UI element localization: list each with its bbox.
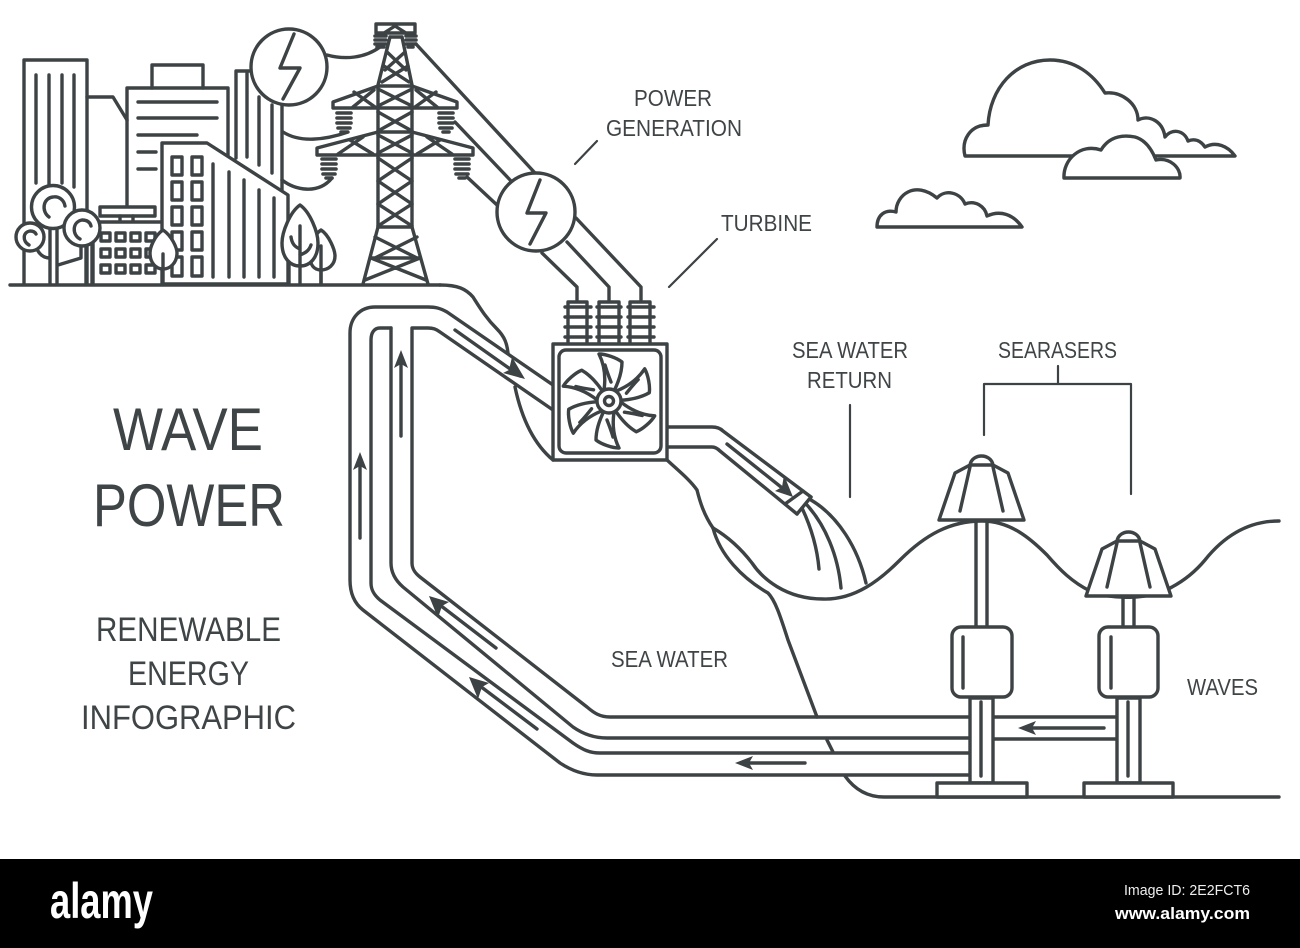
label: waves: WAVES (1187, 674, 1258, 700)
turbine bushings (565, 302, 654, 343)
base (1084, 783, 1173, 797)
title (93, 396, 285, 539)
label: sea water: SEA WATER (611, 646, 728, 672)
generator icon bottom (497, 173, 575, 251)
float (1086, 541, 1171, 596)
trees left (16, 186, 100, 284)
trees right (282, 205, 335, 284)
subtitle (81, 611, 296, 737)
label: searasers: SEARASERS (998, 337, 1117, 363)
building: tall left tower (24, 60, 127, 284)
arrow: up inner pipe (394, 350, 408, 436)
fan blades (562, 354, 656, 448)
float (939, 465, 1024, 520)
base (937, 783, 1027, 797)
ground line (10, 283, 440, 287)
arrow: diagonal upper (429, 596, 496, 648)
label: power generation (606, 85, 742, 141)
arrow: into turbine (455, 330, 525, 379)
pump body (1099, 627, 1158, 697)
wires (282, 44, 641, 300)
sea water return pipe (668, 427, 866, 588)
footer bar (0, 859, 1300, 948)
pump body (952, 627, 1012, 697)
footer logo: alamy (50, 873, 153, 929)
wires to generator (416, 44, 535, 205)
transmission tower (317, 24, 473, 284)
middle cloud (1064, 136, 1180, 178)
generator icon top (251, 29, 327, 105)
tower arms (317, 86, 473, 155)
footer url: www.alamy.com (1114, 904, 1250, 923)
turbine inner frame (559, 350, 661, 453)
subtitle: RENEWABLE (96, 611, 281, 649)
searaser 1 (937, 456, 1027, 797)
arrow: diagonal lower (469, 677, 537, 729)
stem upper (1123, 597, 1134, 627)
subtitle: ENERGY (128, 655, 249, 693)
title: POWER (93, 472, 285, 539)
tree centre (150, 230, 177, 284)
stem upper (976, 522, 987, 627)
tower top cap (376, 24, 415, 33)
stem lower (1117, 698, 1140, 783)
label: power generation: POWER (634, 85, 712, 111)
insulators (322, 36, 469, 178)
stem lower (970, 698, 993, 783)
city buildings (10, 60, 440, 285)
subtitle: INFOGRAPHIC (81, 699, 296, 737)
leader lines (575, 141, 1131, 497)
footer image id: Image ID: 2E2FCT6 (1124, 882, 1250, 899)
tower lattice (365, 37, 426, 280)
coast cliff (440, 285, 1279, 797)
wires to turbine (542, 218, 641, 300)
arrow: horizontal left (735, 756, 805, 770)
arrow: up outer pipe (353, 452, 367, 538)
turbine housing (553, 344, 667, 460)
small cloud (877, 190, 1022, 227)
building: low block with solar panel (93, 207, 163, 284)
big cloud (964, 60, 1235, 156)
water outflow (802, 500, 866, 588)
label: sea water return: SEA WATER (792, 337, 908, 363)
tower body (363, 37, 428, 284)
clouds (877, 60, 1235, 227)
searaser 2 (1084, 532, 1173, 797)
wave line (713, 521, 1279, 599)
arrow: horizontal right (1018, 721, 1104, 735)
label: power generation: GENERATION (606, 115, 742, 141)
title: WAVE (113, 396, 263, 463)
building: front angled building (162, 143, 288, 284)
label: turbine: TURBINE (721, 210, 812, 236)
turbine (553, 302, 667, 460)
label: sea water return: RETURN (807, 367, 892, 393)
building: rear tower (236, 71, 282, 190)
label: sea water return (792, 337, 908, 393)
wires to city (282, 47, 380, 189)
building: office block (127, 65, 228, 205)
flow arrows (353, 330, 1104, 770)
sea water intake pipes (350, 307, 1117, 775)
